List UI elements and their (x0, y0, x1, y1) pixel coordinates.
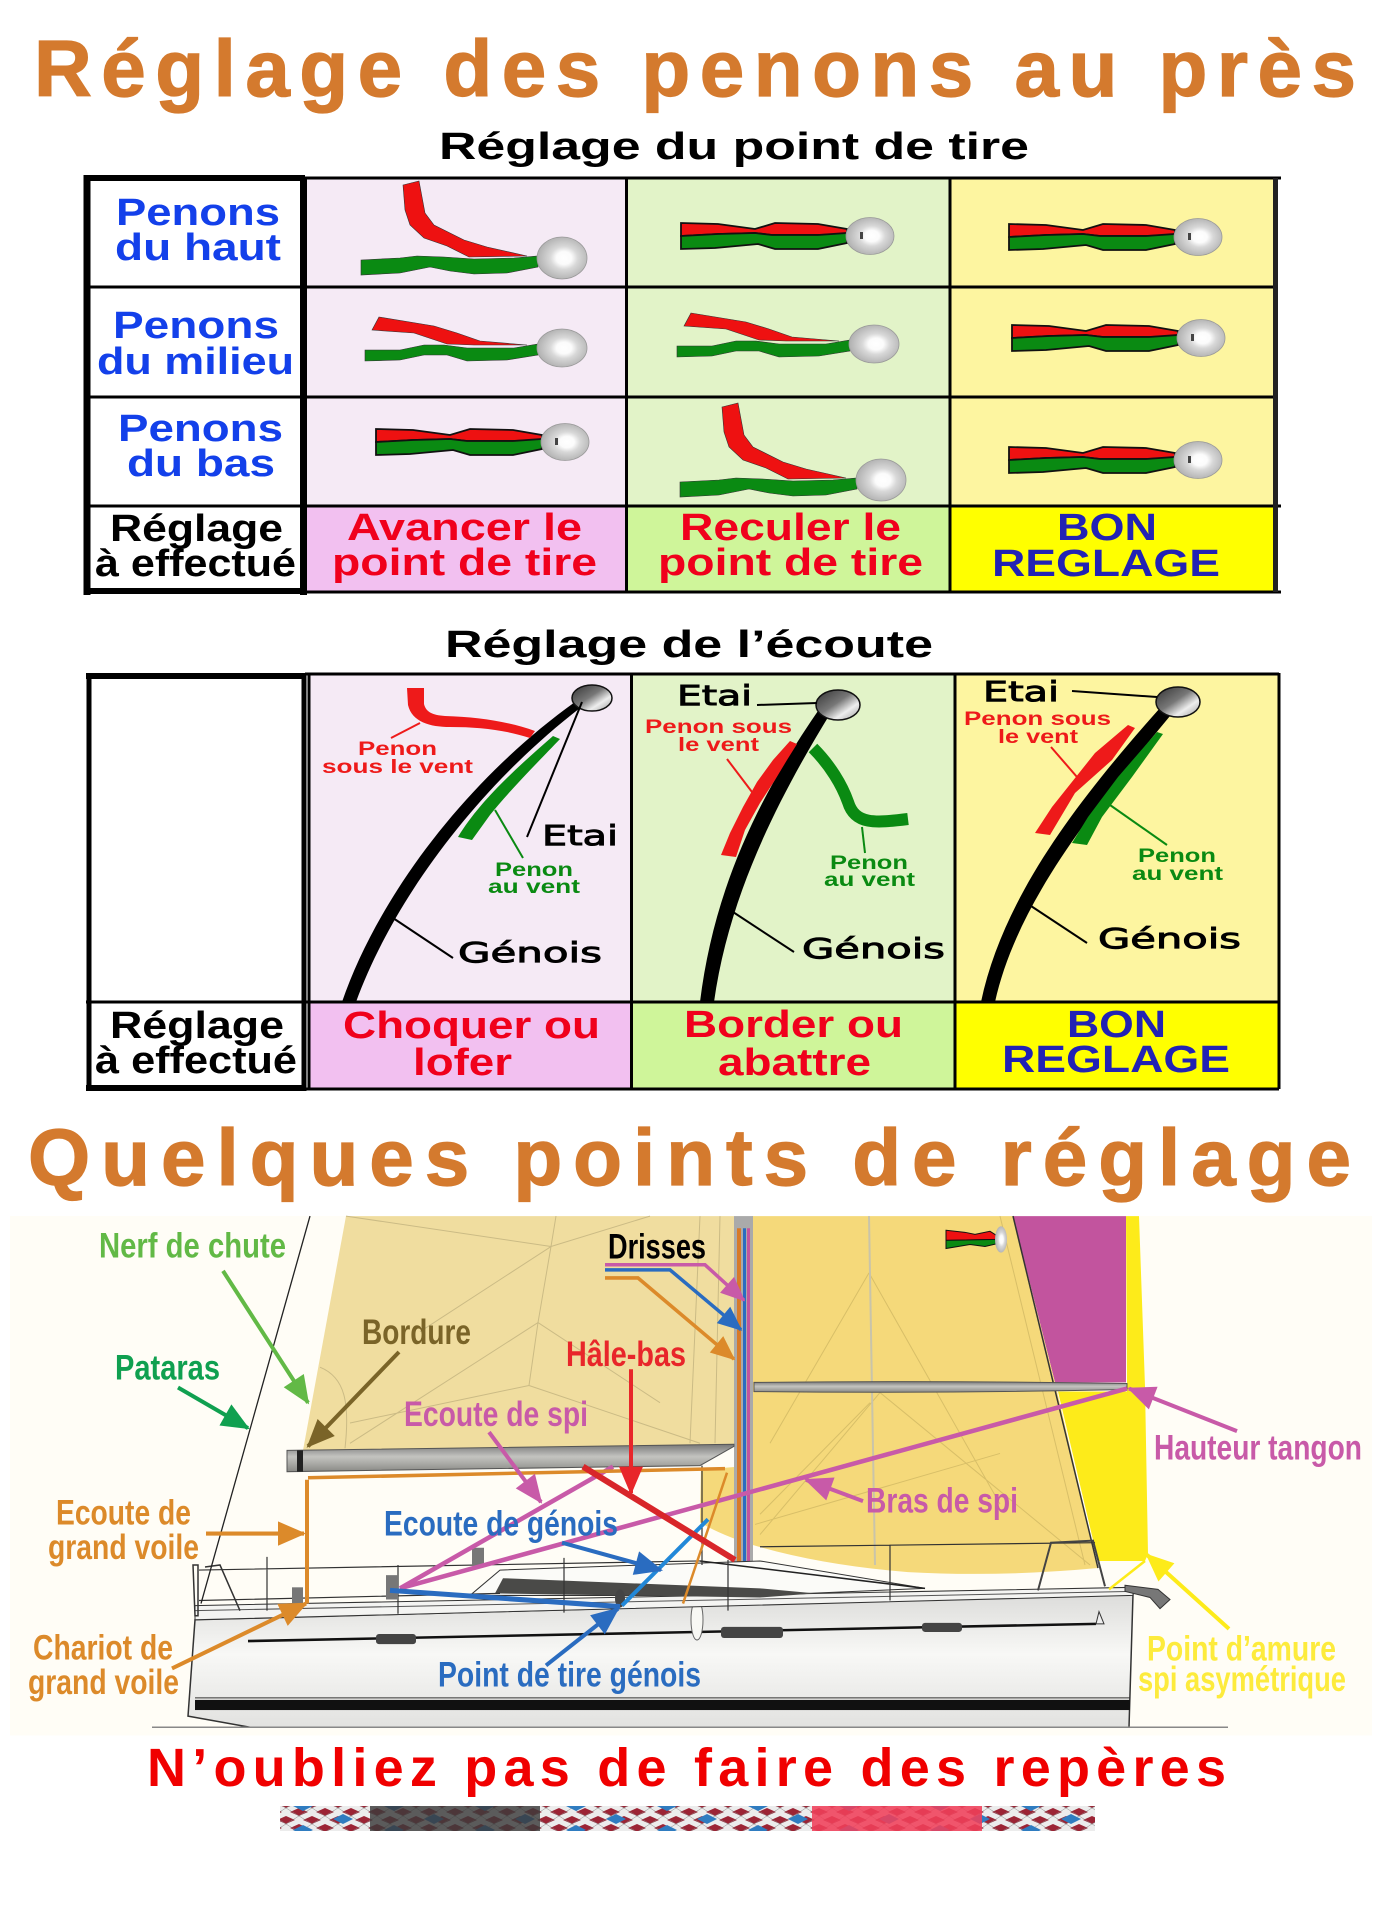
backstay (201, 1216, 310, 1604)
table: réglage de l'écoute (86, 673, 1279, 1091)
row label: Réglage à effectué: Réglage (110, 508, 283, 550)
action: BON REGLAGE: REGLAGE (1002, 1039, 1230, 1081)
label: Ecoute de génois with arrow: Ecoute de génois (384, 1504, 618, 1544)
label: Penon au vent: Penon (1138, 846, 1216, 867)
icon: penon haut, bon (1009, 218, 1222, 256)
title: Réglage des penons au près: Réglage des penons au près (34, 24, 1356, 113)
action: BON REGLAGE: BON (1067, 1004, 1166, 1046)
row label: Réglage à effectué: à effectué (95, 1040, 297, 1082)
label: Penon sous le vent (322, 739, 474, 778)
label: Ecoute de grand voile with arrow: grand voile (48, 1528, 199, 1567)
label: Penon sous le vent (964, 709, 1111, 748)
icon: penon milieu, avancer (365, 317, 587, 367)
label: Penon au vent: Penon (495, 860, 573, 881)
label: Penon sous le vent: Penon sous (645, 717, 792, 738)
panel: voilier et points de réglage (10, 1216, 1372, 1735)
action: Avancer le point de tire: point de tire (332, 542, 597, 584)
action: Border ou abattre: abattre (718, 1042, 871, 1084)
action: Choquer ou lofer (343, 1005, 600, 1084)
action: BON REGLAGE: BON (1057, 507, 1157, 549)
label: Pataras with arrow: Pataras (115, 1348, 220, 1387)
row label: Penons du haut (115, 192, 281, 269)
label: Bordure with arrow: Bordure (362, 1313, 471, 1352)
row label: Réglage à effectué (95, 1005, 297, 1082)
row label: Penons du milieu: du milieu (97, 341, 294, 383)
sail: génois (700, 1216, 1098, 1574)
heading: Réglage de l'écoute: Réglage de l’écoute (445, 624, 933, 666)
icon: penon bas, bon (1009, 442, 1222, 478)
label: Pataras with arrow (115, 1348, 248, 1428)
label: Nerf de chute with arrow: Nerf de chute (99, 1226, 286, 1266)
label: Penon au vent (1132, 846, 1224, 885)
label: Bordure with arrow (308, 1313, 471, 1446)
action: Choquer ou lofer: Choquer ou (343, 1005, 600, 1047)
row label: Réglage à effectué: Réglage (110, 1005, 284, 1047)
label: Penon sous le vent: le vent (998, 727, 1079, 748)
label: Penon sous le vent: Penon (358, 739, 437, 760)
label: Etai: Etai (677, 679, 752, 712)
icon: penon haut, reculer (681, 218, 894, 254)
label: Nerf de chute with arrow (99, 1226, 308, 1403)
action: Reculer le point de tire (658, 507, 923, 584)
label: Hâle-bas with arrow: Hâle-bas (566, 1335, 686, 1374)
icon: penon milieu, bon (1012, 320, 1225, 356)
action: Border ou abattre (684, 1004, 903, 1084)
label: Ecoute de spi with arrow (404, 1395, 588, 1502)
lines: bras et écoute de spi (400, 1389, 1127, 1588)
row label: Penons du haut: Penons (116, 192, 280, 234)
label: Chariot de grand voile with arrow: Chariot de (33, 1628, 173, 1667)
icon: penon milieu, reculer (677, 313, 899, 363)
action: Border ou abattre: Border ou (684, 1004, 903, 1046)
label: Penon sous le vent (645, 717, 792, 756)
row label: Penons du bas: Penons (118, 408, 283, 450)
label: Point d'amure spi asymétrique with arrow (1109, 1555, 1346, 1699)
action: Choquer ou lofer: lofer (413, 1042, 512, 1084)
label: Ecoute de spi with arrow: Ecoute de spi (404, 1395, 588, 1434)
sail: grand-voile (303, 1216, 734, 1450)
label: Bras de spi with arrow (806, 1480, 1018, 1520)
diagram: bon réglage écoute (964, 675, 1241, 1002)
label: Génois: Génois (458, 936, 602, 969)
icon: penon bas, avancer (376, 424, 589, 460)
lines: écoute de grand-voile (307, 1469, 727, 1604)
label: Penon au vent (824, 853, 916, 891)
label: Penon au vent: Penon (830, 853, 908, 874)
label: Ecoute de grand voile with arrow (48, 1493, 304, 1567)
title: Quelques points de réglage: Quelques points de réglage (28, 1113, 1351, 1202)
label: Penon sous le vent: Penon sous (964, 709, 1111, 730)
label: Génois: Génois (1098, 922, 1241, 955)
sail: spi magenta (1013, 1216, 1126, 1382)
label: Drisses with arrows: Drisses (608, 1227, 706, 1267)
label: Penon sous le vent: le vent (678, 735, 760, 756)
table: réglage du point de tire (84, 175, 1281, 595)
deck and cabin (193, 1466, 1170, 1620)
line: hâle-bas (583, 1467, 735, 1560)
label: Génois: Génois (802, 932, 945, 965)
row label: Penons du bas: du bas (127, 443, 275, 485)
caption: N'oubliez pas de faire des repères: N’oubliez pas de faire des repères (147, 1738, 1226, 1798)
rope with marks (280, 1806, 1095, 1831)
icon: penon sur génois (946, 1226, 1007, 1253)
spinnaker pole (754, 1382, 1127, 1392)
label: Penon sous le vent: sous le vent (322, 757, 474, 778)
row label: Réglage à effectué: à effectué (95, 543, 296, 585)
action: BON REGLAGE (992, 507, 1220, 585)
label: Penon au vent (488, 860, 581, 898)
heading: Réglage du point de tire: Réglage du point de tire (439, 126, 1029, 168)
label: Drisses with arrows (605, 1227, 744, 1359)
icon: penon bas, reculer (680, 403, 906, 501)
label: Penon au vent: au vent (488, 877, 581, 898)
hull (152, 1594, 1228, 1727)
label: Point de tire génois with arrow: Point de tire génois (438, 1656, 701, 1695)
label: Bras de spi with arrow: Bras de spi (866, 1481, 1018, 1520)
action: Reculer le point de tire: point de tire (658, 542, 923, 584)
lines: écoute de génois (390, 1519, 708, 1607)
row label: Penons du haut: du haut (115, 227, 281, 269)
boom (287, 1444, 734, 1472)
label: Etai: Etai (542, 819, 618, 852)
row label: Penons du bas (118, 408, 283, 485)
row label: Penons du milieu: Penons (113, 305, 279, 347)
action: Avancer le point de tire (332, 507, 597, 584)
label: Penon au vent: au vent (824, 870, 916, 891)
action: BON REGLAGE (1002, 1004, 1230, 1081)
row label: Réglage à effectué (95, 508, 296, 585)
diagram: border ou abattre (645, 679, 945, 1002)
sail: spi jaune (1058, 1216, 1148, 1561)
label: Point de tire génois with arrow (438, 1609, 701, 1695)
mast (734, 1216, 753, 1565)
row label: Penons du milieu (97, 305, 294, 383)
action: Avancer le point de tire: Avancer le (347, 507, 582, 549)
action: BON REGLAGE: REGLAGE (992, 543, 1220, 585)
label: Chariot de grand voile with arrow: grand voile (28, 1663, 179, 1702)
diagram: choquer ou lofer (322, 685, 618, 1002)
label: Ecoute de génois with arrow (384, 1504, 661, 1570)
label: Ecoute de grand voile with arrow: Ecoute de (56, 1493, 191, 1532)
icon: penon haut, avancer (361, 181, 587, 279)
action: Reculer le point de tire: Reculer le (680, 507, 901, 549)
label: Point d'amure spi asymétrique with arrow: Point d’amure (1147, 1629, 1336, 1668)
label: Hauteur tangon with arrow (1129, 1389, 1362, 1468)
label: Etai: Etai (983, 675, 1059, 708)
label: Chariot de grand voile with arrow (28, 1604, 306, 1702)
label: Penon au vent: au vent (1132, 864, 1224, 885)
